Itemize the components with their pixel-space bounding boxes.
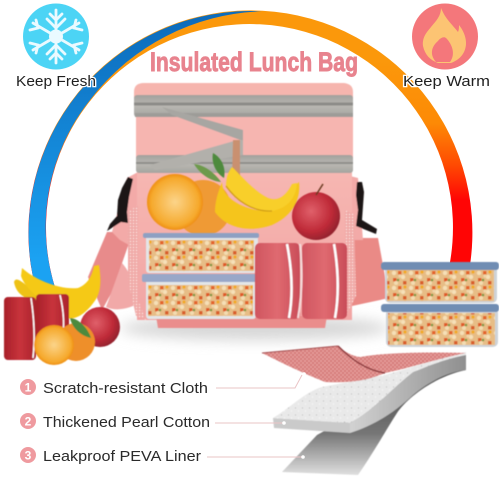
lower panel (137, 170, 352, 320)
glass containers in bag (142, 233, 259, 319)
zipper band top (134, 95, 353, 117)
apple (292, 192, 340, 240)
can right (36, 294, 69, 350)
leaf (70, 318, 91, 338)
leather tab (232, 140, 240, 176)
main banana (21, 265, 100, 318)
fruit inside bag (147, 153, 340, 240)
callout 2 (20, 413, 286, 431)
layer: pearl cotton top (273, 352, 466, 423)
heat arc: orange to red (28, 10, 472, 290)
side mesh pockets (128, 205, 146, 320)
label: Keep Fresh: Keep Fresh (16, 74, 96, 90)
callout 1: Scratch-resistant Cloth (43, 380, 208, 397)
orange (57, 323, 95, 361)
orange (175, 180, 231, 236)
right strap (350, 238, 389, 306)
cold arc: blue (29, 11, 262, 290)
apple (80, 307, 120, 347)
right side tab (350, 176, 363, 240)
black clip left (107, 177, 133, 231)
left fruit group (4, 265, 120, 365)
title: Insulated Lunch Bag (150, 47, 358, 77)
bag shadow (120, 316, 390, 340)
callout 2: 2 (25, 414, 32, 428)
callout 3: Leakproof PEVA Liner (43, 448, 201, 465)
left strap (88, 232, 128, 310)
front flap (156, 316, 327, 328)
callout 2: Thickened Pearl Cotton (43, 414, 210, 431)
layer: PEVA liner (282, 360, 466, 475)
material layers (262, 346, 466, 475)
lid (134, 83, 353, 100)
leaves (194, 164, 221, 182)
upper banana (226, 167, 297, 211)
callout 1: 1 (25, 380, 32, 394)
layer: scratch-resistant cloth (262, 346, 466, 382)
orange slice (147, 174, 203, 230)
layer: pearl cotton front (273, 418, 350, 433)
orange slice (34, 325, 74, 365)
layer: pearl cotton side (350, 354, 466, 433)
callout 3 (20, 447, 305, 465)
upper panel (136, 112, 353, 160)
lower banana (215, 182, 299, 229)
left side tab (112, 172, 138, 250)
lower banana (14, 280, 70, 316)
black clip right (356, 182, 377, 234)
zipper band bottom (136, 155, 353, 173)
callout 3: 3 (25, 448, 32, 462)
lunch bag (88, 83, 389, 328)
strap loop (106, 263, 138, 309)
callout 1 (20, 372, 306, 397)
label: Keep Warm: Keep Warm (403, 74, 490, 90)
drinks in bag (255, 243, 347, 319)
icon: flame badge (412, 4, 478, 70)
right stacked containers (381, 262, 499, 347)
diagonal pocket zipper (162, 107, 243, 141)
icon: snowflake badge (23, 4, 89, 70)
can left (4, 297, 36, 360)
